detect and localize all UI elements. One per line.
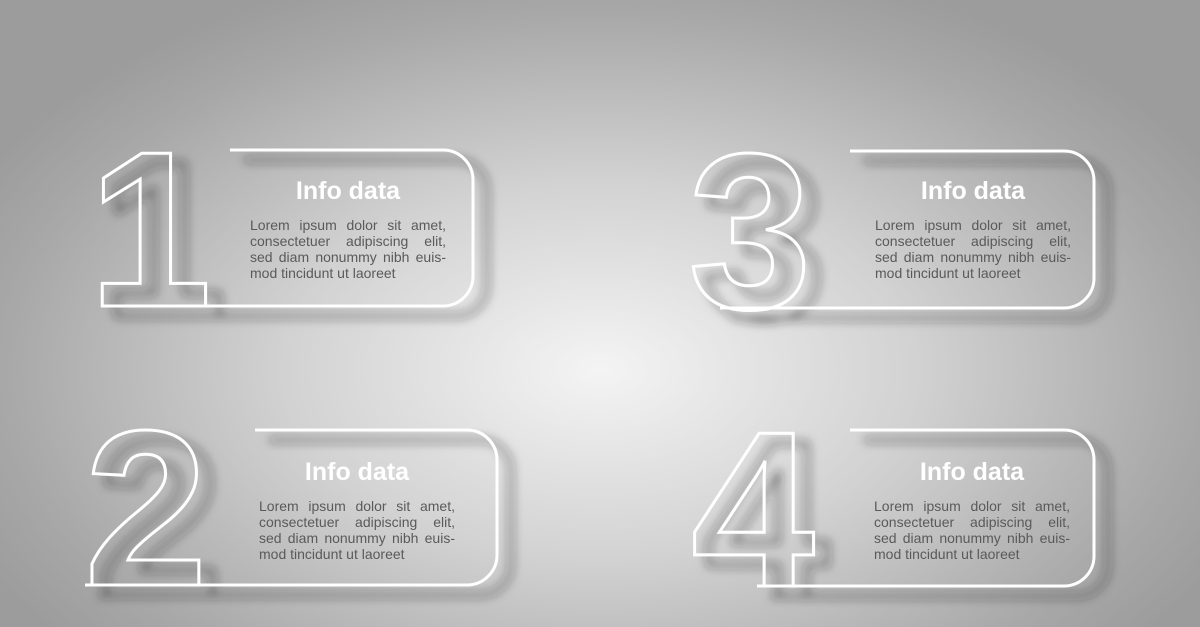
- panel 1 frame: [88, 106, 473, 354]
- panel 3 frame: [688, 108, 1094, 356]
- text block 2: [259, 458, 455, 562]
- text block 1: consectetuer adipiscing elit,: [250, 233, 446, 249]
- text block 4: consectetuer adipiscing elit,: [874, 514, 1070, 530]
- text block 1: Lorem ipsum dolor sit amet,: [250, 217, 446, 233]
- panel 4 frame: [691, 386, 1094, 627]
- text block 3: mod tincidunt ut laoreet: [875, 265, 1021, 281]
- digit 4: 4: [691, 386, 815, 627]
- text block 2: Lorem ipsum dolor sit amet,: [259, 498, 455, 514]
- text block 2: mod tincidunt ut laoreet: [259, 546, 405, 562]
- panel 2 frame: [84, 385, 497, 627]
- text block 4: [874, 458, 1070, 562]
- digit 2: 2: [84, 385, 208, 627]
- text block 2: Info data: [305, 458, 409, 486]
- text block 4: Info data: [920, 458, 1024, 486]
- text block 1: [250, 177, 446, 281]
- text block 3: [875, 177, 1071, 281]
- text block 4: Lorem ipsum dolor sit amet,: [874, 498, 1070, 514]
- text block 3: Info data: [921, 177, 1025, 205]
- digit 3: 3: [688, 108, 812, 356]
- text block 2: consectetuer adipiscing elit,: [259, 514, 455, 530]
- text block 2: sed diam nonummy nibh euis-: [259, 530, 455, 546]
- text block 3: Lorem ipsum dolor sit amet,: [875, 217, 1071, 233]
- text block 4: mod tincidunt ut laoreet: [874, 546, 1020, 562]
- text block 1: Info data: [296, 177, 400, 205]
- digit 1: 1: [88, 106, 212, 354]
- text block 3: sed diam nonummy nibh euis-: [875, 249, 1071, 265]
- text block 4: sed diam nonummy nibh euis-: [874, 530, 1070, 546]
- text block 1: mod tincidunt ut laoreet: [250, 265, 396, 281]
- text block 1: sed diam nonummy nibh euis-: [250, 249, 446, 265]
- text block 3: consectetuer adipiscing elit,: [875, 233, 1071, 249]
